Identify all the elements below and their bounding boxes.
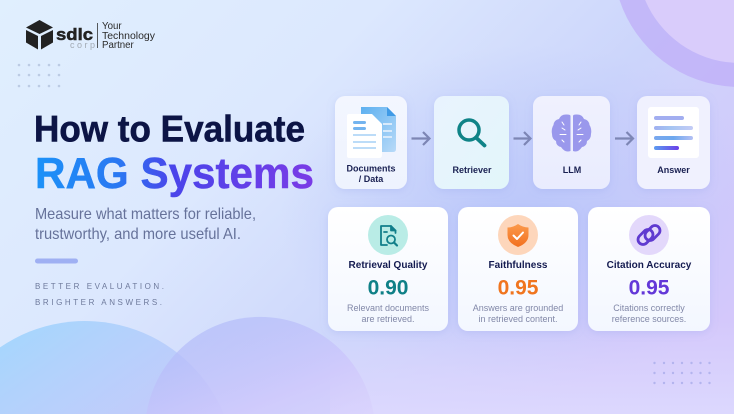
description: retrieval quality: are retrieved.: [361, 314, 415, 324]
icon: cube: [26, 20, 53, 50]
subtitle: trustworthy, and more useful AI.: [35, 226, 241, 243]
description: citation accuracy: [612, 303, 686, 324]
logo wordmark: sdlc: [56, 25, 93, 44]
value: 0.90: 0.90: [368, 276, 408, 300]
accent bar: [35, 258, 78, 264]
arrow: [412, 132, 430, 145]
label: llm: LLM: [563, 165, 581, 175]
description: faithfulness: [473, 303, 563, 324]
title: RAG Systems: [35, 149, 314, 198]
label: documents: Documents: [346, 164, 396, 174]
title: How to Evaluate: [34, 108, 305, 150]
description: faithfulness: Answers are grounded: [473, 303, 563, 313]
value: 0.95: 0.95: [629, 276, 670, 300]
description: faithfulness: in retrieved content.: [478, 314, 558, 324]
panel: faithfulness: [458, 207, 578, 331]
icon: document search: [368, 215, 408, 255]
tagline: BETTER EVALUATION.: [35, 282, 164, 291]
logo corp: corp: [70, 40, 95, 50]
logo: [26, 20, 155, 51]
panel: citation accuracy: [588, 207, 710, 331]
label: documents: / Data: [359, 174, 384, 184]
title: [34, 108, 314, 198]
icon: shield check: [498, 215, 538, 255]
tagline: BRIGHTER ANSWERS.: [35, 298, 162, 307]
panel: llm: [533, 96, 610, 189]
logo tagline: [102, 21, 155, 51]
label: answer: Answer: [657, 165, 690, 175]
subtitle: Measure what matters for reliable,: [35, 206, 256, 223]
label: documents: [346, 164, 396, 184]
panel: retriever: [434, 96, 509, 189]
logo tagline: Technology: [102, 31, 155, 42]
label: retriever: Retriever: [452, 165, 492, 175]
icon: chain link: [629, 215, 669, 255]
panel: retrieval quality: [328, 207, 448, 331]
decorative circles: top right: [620, 0, 734, 87]
logo tagline: Partner: [102, 40, 135, 51]
description: citation accuracy: Citations correctly: [613, 303, 685, 313]
description: retrieval quality: Relevant documents: [347, 303, 430, 313]
tagline: [35, 282, 164, 307]
value: 0.95: 0.95: [498, 276, 539, 300]
decorative circles: bottom left: [0, 317, 374, 414]
heading: faithfulness: Faithfulness: [489, 260, 548, 271]
subtitle: [35, 206, 256, 243]
arrow: [615, 132, 633, 145]
icon: brain: [552, 114, 591, 152]
icon: magnifier: [459, 120, 484, 146]
icon: documents: [347, 107, 396, 158]
arrow: [514, 132, 530, 145]
heading: retrieval quality: Retrieval Quality: [349, 260, 428, 271]
panel: answer: [637, 96, 710, 189]
icon: answer document: [648, 107, 699, 158]
logo tagline: Your: [102, 21, 122, 32]
dots: bottom right: [653, 362, 711, 384]
dots: top left: [18, 64, 60, 87]
heading: citation accuracy: Citation Accuracy: [607, 260, 692, 271]
description: retrieval quality: [347, 303, 430, 324]
description: citation accuracy: reference sources.: [612, 314, 686, 324]
panel: documents: [335, 96, 407, 189]
